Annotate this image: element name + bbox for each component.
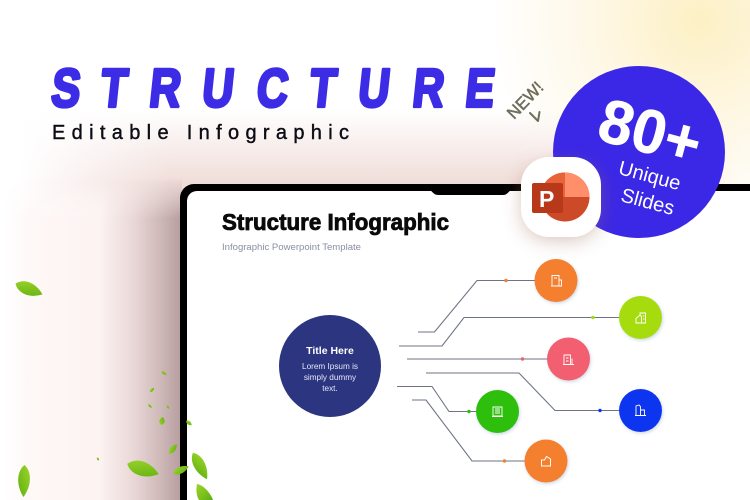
badge label: Unique <box>616 157 683 195</box>
powerpoint icon <box>521 157 601 239</box>
icon: office <box>563 355 574 364</box>
badge circle <box>553 66 725 238</box>
central circle body <box>302 362 358 393</box>
badge label: Slides <box>618 185 677 220</box>
icon: building <box>551 276 562 286</box>
central circle body: simply dummy <box>304 373 357 382</box>
icon: grid building <box>492 407 503 416</box>
central circle title: Title Here <box>306 345 354 357</box>
central circle body: Lorem Ipsum is <box>302 362 358 371</box>
node: orange bottom <box>503 440 568 482</box>
subtitle: Editable Infographic <box>52 122 349 144</box>
icon: towers <box>635 405 646 416</box>
node: green <box>467 390 519 433</box>
leaves <box>13 278 213 500</box>
icon: house block <box>636 313 646 323</box>
node: orange top <box>504 259 578 302</box>
laptop frame <box>180 184 750 500</box>
title: STRUCTURE <box>49 59 498 119</box>
badge label <box>616 157 683 220</box>
new badge: NEW! <box>503 78 547 123</box>
connector lines <box>397 280 620 461</box>
central circle body: text. <box>322 384 338 393</box>
badge number: 80+ <box>591 86 709 179</box>
node: lime <box>591 296 662 339</box>
node: blue <box>598 389 662 432</box>
node: pink <box>521 338 590 380</box>
slide heading: Structure Infographic <box>222 209 449 235</box>
slide subheading: Infographic Powerpoint Template <box>222 242 361 253</box>
icon letter: P <box>539 186 554 212</box>
central circle <box>279 315 381 417</box>
icon: house <box>542 456 550 466</box>
